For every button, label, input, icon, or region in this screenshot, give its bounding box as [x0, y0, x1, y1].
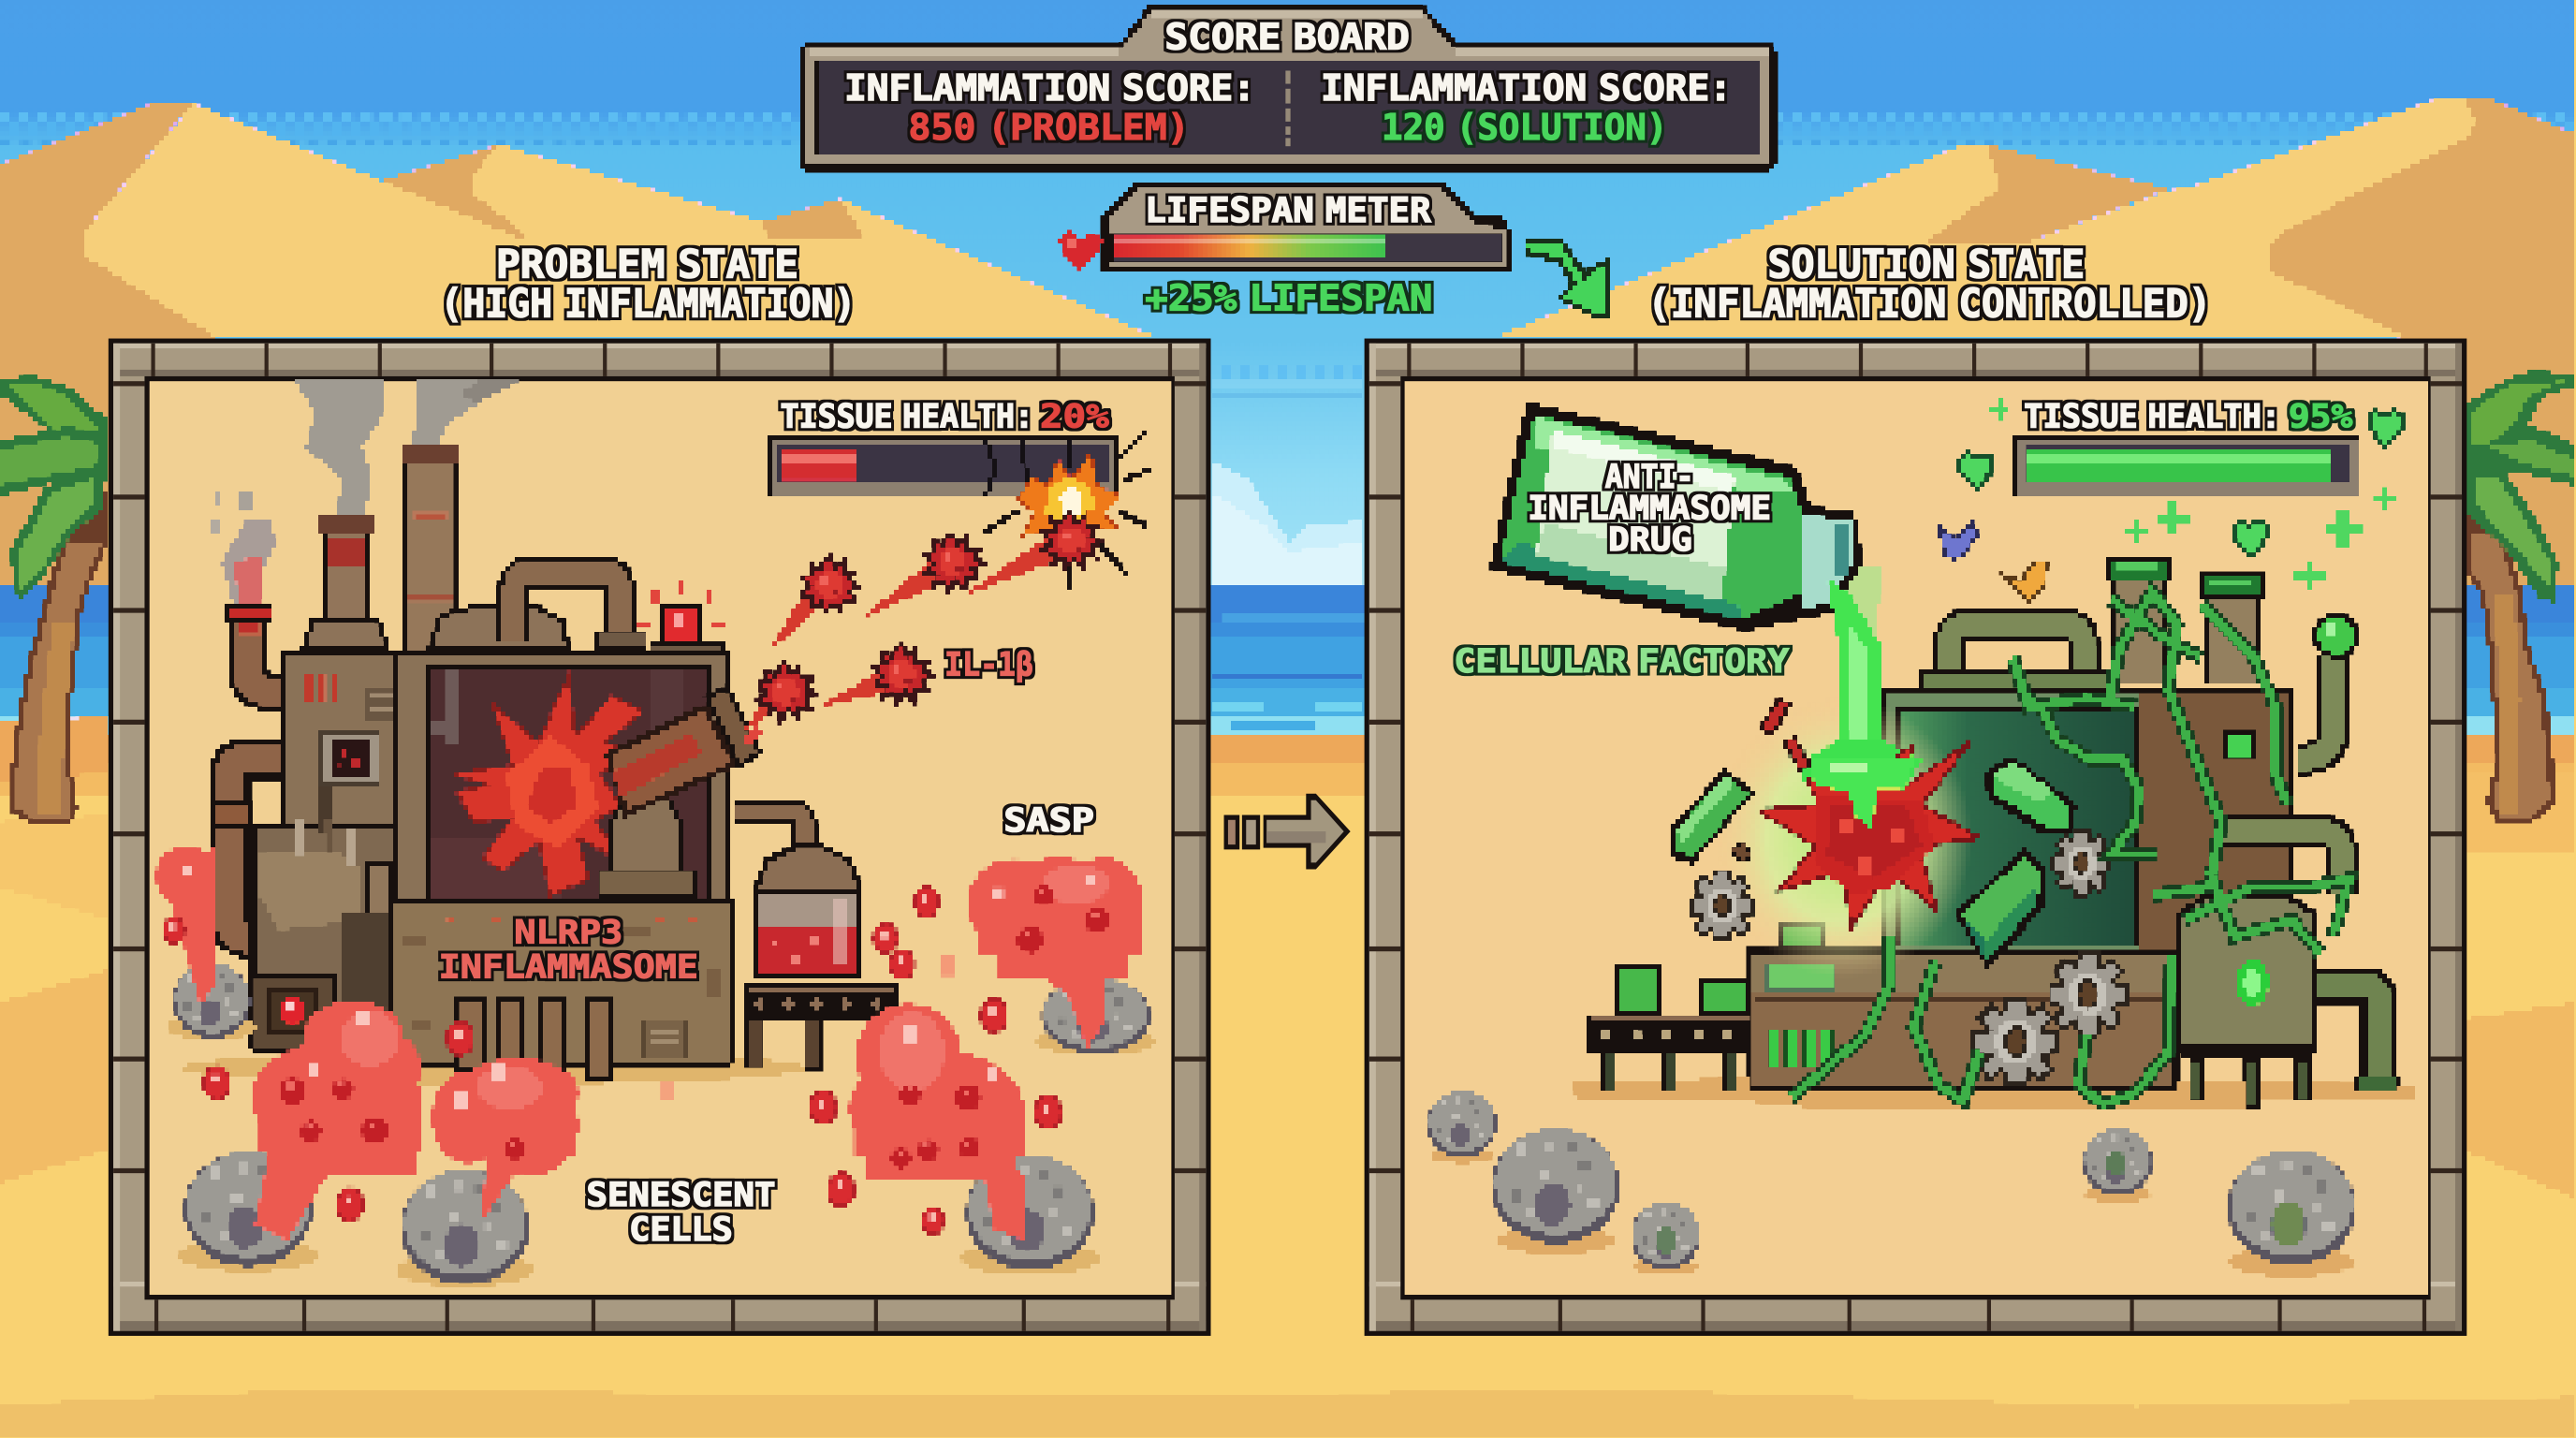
hearts, sparkles and butterflies [1939, 400, 2402, 601]
vines over factory [1791, 592, 2349, 1104]
IL-1β projectiles and trails [742, 534, 1061, 731]
heading: problem state [440, 242, 856, 327]
cleared senescent cells (inactive) [1427, 1091, 2356, 1277]
scoreboard frame [800, 7, 1776, 171]
scoreboard panel [800, 7, 1776, 171]
panel: problem state (high inflammation) [109, 339, 1211, 1336]
lifespan meter frame and heart [1060, 183, 1510, 271]
scoreboard text: INFLAMMATION SCORE: [844, 67, 1255, 110]
panel: solution state (inflammation controlled) [1365, 339, 2466, 1336]
cellular factory: NLRP3 machine [181, 444, 900, 1084]
labels: solution panel: DRUG [1608, 521, 1692, 559]
labels: solution panel: TISSUE HEALTH: [2024, 397, 2280, 435]
heading: problem state: PROBLEM STATE [496, 242, 798, 287]
smoke plumes from chimneys [211, 381, 518, 605]
tissue health label: problem: 20% [1040, 397, 1109, 435]
lifespan meter text: LIFESPAN METER [1145, 190, 1432, 230]
scoreboard text: 850 (PROBLEM) [909, 107, 1190, 149]
scoreboard text: SCORE BOARD [1164, 17, 1410, 59]
heading: solution state: (INFLAMMATION CONTROLLED) [1647, 281, 2211, 327]
labels: problem panel: CELLS [629, 1211, 733, 1249]
labels: problem panel: INFLAMMASOME [439, 947, 698, 986]
right palm tree [2467, 370, 2576, 822]
labels: problem panel: IL-1β [944, 645, 1033, 683]
anti-inflammasome drug: bottle pouring, glow and pills [1493, 406, 2110, 977]
labels: solution panel: INFLAMMASOME [1528, 490, 1771, 528]
left palm tree [0, 374, 109, 823]
arrow: center transition arrow between panels [1224, 794, 1351, 869]
labels: solution panel: CELLULAR FACTORY [1454, 642, 1789, 681]
tissue health label: problem: TISSUE HEALTH: [781, 397, 1033, 435]
labels: solution panel [1454, 397, 2352, 681]
heading: problem state: (HIGH INFLAMMATION) [440, 281, 856, 327]
panel frame: right stone border [1365, 339, 2466, 1336]
heading: solution state [1647, 242, 2211, 327]
labels: problem panel: NLRP3 [514, 913, 622, 951]
lifespan meter text: +25% LIFESPAN [1145, 278, 1432, 320]
labels: problem panel: SENESCENT [587, 1176, 775, 1214]
labels: problem panel: SASP [1003, 801, 1094, 840]
tissue health bar: 95% [2014, 437, 2361, 498]
scoreboard text: 120 (SOLUTION) [1382, 107, 1667, 149]
tissue health bar: 20% [768, 397, 1150, 588]
scoreboard text [844, 17, 1732, 149]
recovered factory with vines [1573, 559, 2415, 1110]
labels: solution panel: 95% [2289, 397, 2352, 435]
heading: solution state: SOLUTION STATE [1767, 242, 2085, 287]
scoreboard divider [1285, 70, 1291, 146]
labels: problem panel [439, 645, 1094, 1249]
scoreboard text: INFLAMMATION SCORE: [1321, 67, 1732, 110]
lifespan meter [1060, 183, 1510, 320]
panel frame: left stone border [109, 339, 1211, 1336]
labels: solution panel: ANTI- [1605, 458, 1694, 496]
lifespan meter text [1145, 190, 1432, 320]
senescent cells and SASP clouds [156, 846, 1155, 1286]
arrow: green curved arrow to solution state [1523, 237, 1612, 317]
